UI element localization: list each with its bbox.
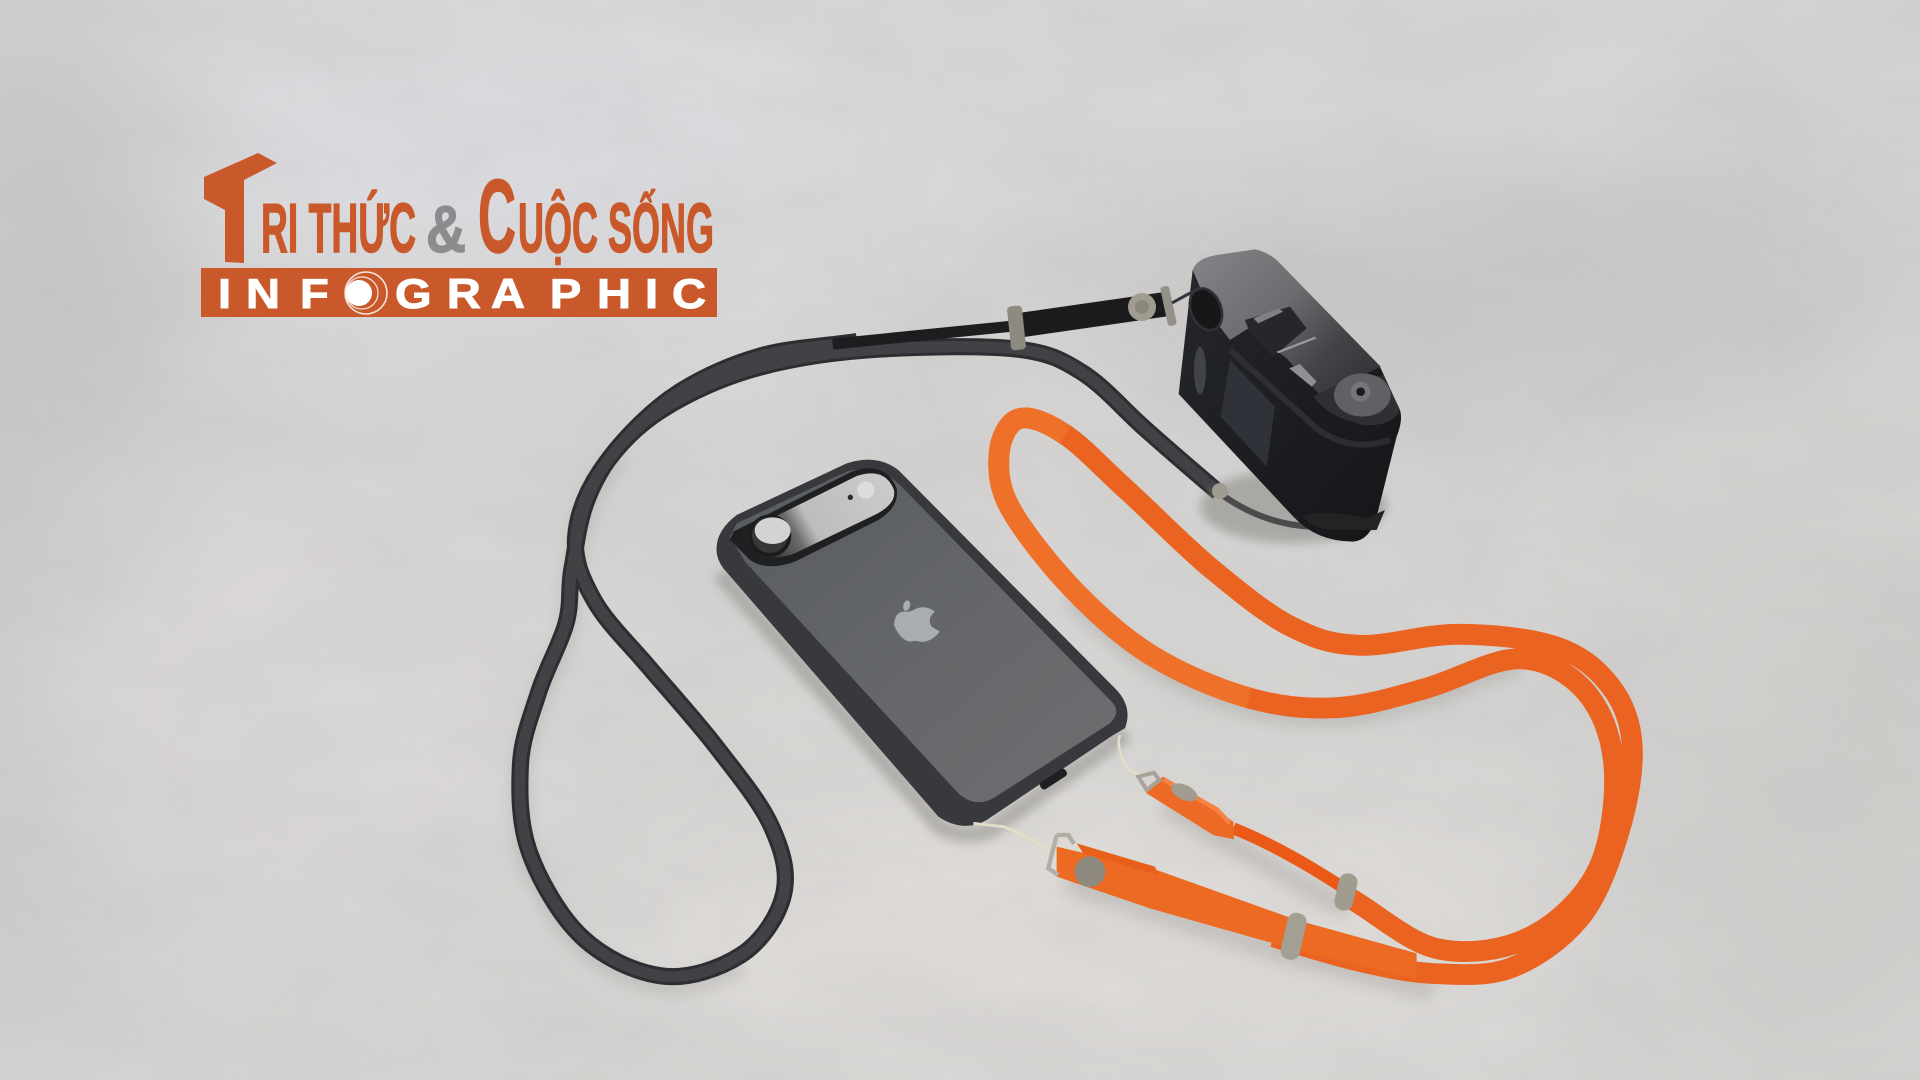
camera lug and strap end bbox=[1303, 510, 1385, 530]
camera strap hardware bbox=[1007, 285, 1228, 499]
camera dial bbox=[1313, 373, 1400, 425]
keeper on black strap bbox=[1007, 305, 1026, 351]
phone back glass bbox=[730, 469, 1116, 802]
camera bar bbox=[730, 468, 897, 566]
metal ring end bbox=[1160, 285, 1177, 326]
logo: target icon bbox=[345, 272, 387, 314]
logo: name text: UỘC SỐNG bbox=[518, 188, 714, 267]
dark strap: upper black tab bbox=[1016, 304, 1169, 326]
camera top plate bbox=[1193, 249, 1381, 395]
camera bbox=[1179, 249, 1401, 543]
shadows under objects bbox=[520, 456, 1518, 989]
logo: name text: & bbox=[426, 192, 466, 266]
phone bbox=[716, 460, 1128, 834]
flash bbox=[857, 481, 875, 499]
logo: name text: RI THỨC bbox=[261, 189, 416, 267]
lanyard cords bbox=[973, 823, 1048, 851]
logo: T mark bbox=[204, 153, 277, 263]
logo: banner text: INF OGRAPHIC bbox=[218, 271, 706, 317]
main lens bbox=[749, 514, 791, 557]
phone port bbox=[1039, 767, 1068, 791]
camera viewfinder bbox=[1184, 284, 1228, 335]
apple logo bbox=[894, 600, 940, 642]
snap on black strap bbox=[1128, 293, 1156, 321]
microphone dot bbox=[848, 495, 853, 500]
phone case frame bbox=[716, 460, 1128, 826]
orange strap: long strand bbox=[999, 418, 1632, 975]
camera body bbox=[1179, 270, 1401, 542]
camera rear screen bbox=[1221, 360, 1275, 467]
keeper on lower lead bbox=[1212, 483, 1228, 499]
logo: name text: C bbox=[478, 159, 516, 275]
logo: infographic banner bbox=[201, 268, 717, 317]
dark strap bbox=[520, 304, 1378, 977]
slider keepers bbox=[1279, 911, 1308, 962]
lower wide strap bbox=[1048, 835, 1417, 979]
logo: Tri Thức & Cuộc Sống Infographic bbox=[201, 153, 717, 317]
camera hot shoe bbox=[1245, 307, 1307, 357]
upper short strap bbox=[1138, 773, 1347, 890]
orange straps, cords and clips bbox=[973, 735, 1417, 979]
camera band bbox=[1230, 350, 1390, 445]
dark strap: lower thin lead bbox=[1218, 492, 1378, 527]
logo: name text bbox=[261, 159, 714, 275]
